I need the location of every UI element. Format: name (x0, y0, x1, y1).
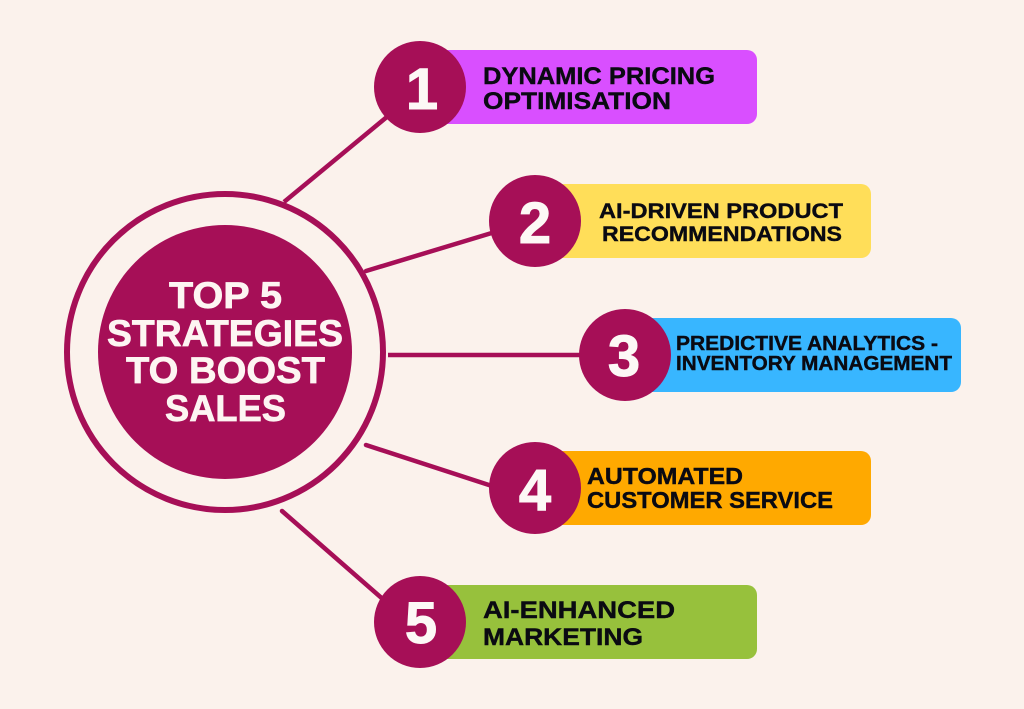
label 5: AI-ENHANCED (483, 597, 675, 624)
label 5: MARKETING (483, 624, 643, 651)
item 1 (374, 41, 757, 133)
label 3: INVENTORY MANAGEMENT (676, 353, 952, 375)
number 4: 4 (519, 458, 551, 523)
item 5 (374, 576, 757, 668)
label bar 4 (535, 451, 871, 525)
connector: hub to 5 (282, 511, 385, 601)
connector: hub to 3 (388, 353, 582, 357)
hub title (107, 275, 343, 429)
item 3 (579, 309, 961, 401)
connector: hub to 1 (284, 116, 388, 202)
label 3: PREDICTIVE ANALYTICS - (676, 333, 938, 355)
item 2 (489, 175, 871, 267)
connector: hub to 4 (366, 445, 492, 486)
hub title: STRATEGIES (107, 313, 343, 354)
number 5: 5 (405, 591, 437, 656)
label bar 2 (535, 184, 871, 258)
label bar 5 (420, 585, 757, 659)
hub outer ring (67, 194, 383, 510)
label 3 (676, 333, 952, 375)
number badge 3 (579, 309, 671, 401)
label 5 (483, 597, 675, 651)
label 4: CUSTOMER SERVICE (587, 487, 833, 513)
number 3: 3 (608, 324, 640, 389)
central hub (67, 194, 383, 510)
label bar 3 (625, 318, 961, 392)
label 1: DYNAMIC PRICING (483, 63, 715, 90)
label 2: AI-DRIVEN PRODUCT (599, 199, 843, 223)
label 1: OPTIMISATION (483, 88, 671, 115)
connector: hub to 2 (366, 232, 495, 271)
label bar 1 (420, 50, 757, 124)
number badge 2 (489, 175, 581, 267)
number badge 4 (489, 442, 581, 534)
hub title: TO BOOST (126, 350, 325, 391)
number badge 5 (374, 576, 466, 668)
label 2 (599, 199, 843, 246)
label 1 (483, 63, 715, 115)
label 2: RECOMMENDATIONS (602, 222, 842, 246)
number 1: 1 (406, 57, 438, 122)
number badge 1 (374, 41, 466, 133)
hub title: TOP 5 (169, 275, 282, 316)
label 4 (587, 463, 833, 513)
hub title: SALES (165, 388, 286, 429)
hub inner disc (98, 225, 352, 479)
label 4: AUTOMATED (587, 463, 743, 489)
item 4 (489, 442, 871, 534)
number 2: 2 (519, 191, 551, 256)
